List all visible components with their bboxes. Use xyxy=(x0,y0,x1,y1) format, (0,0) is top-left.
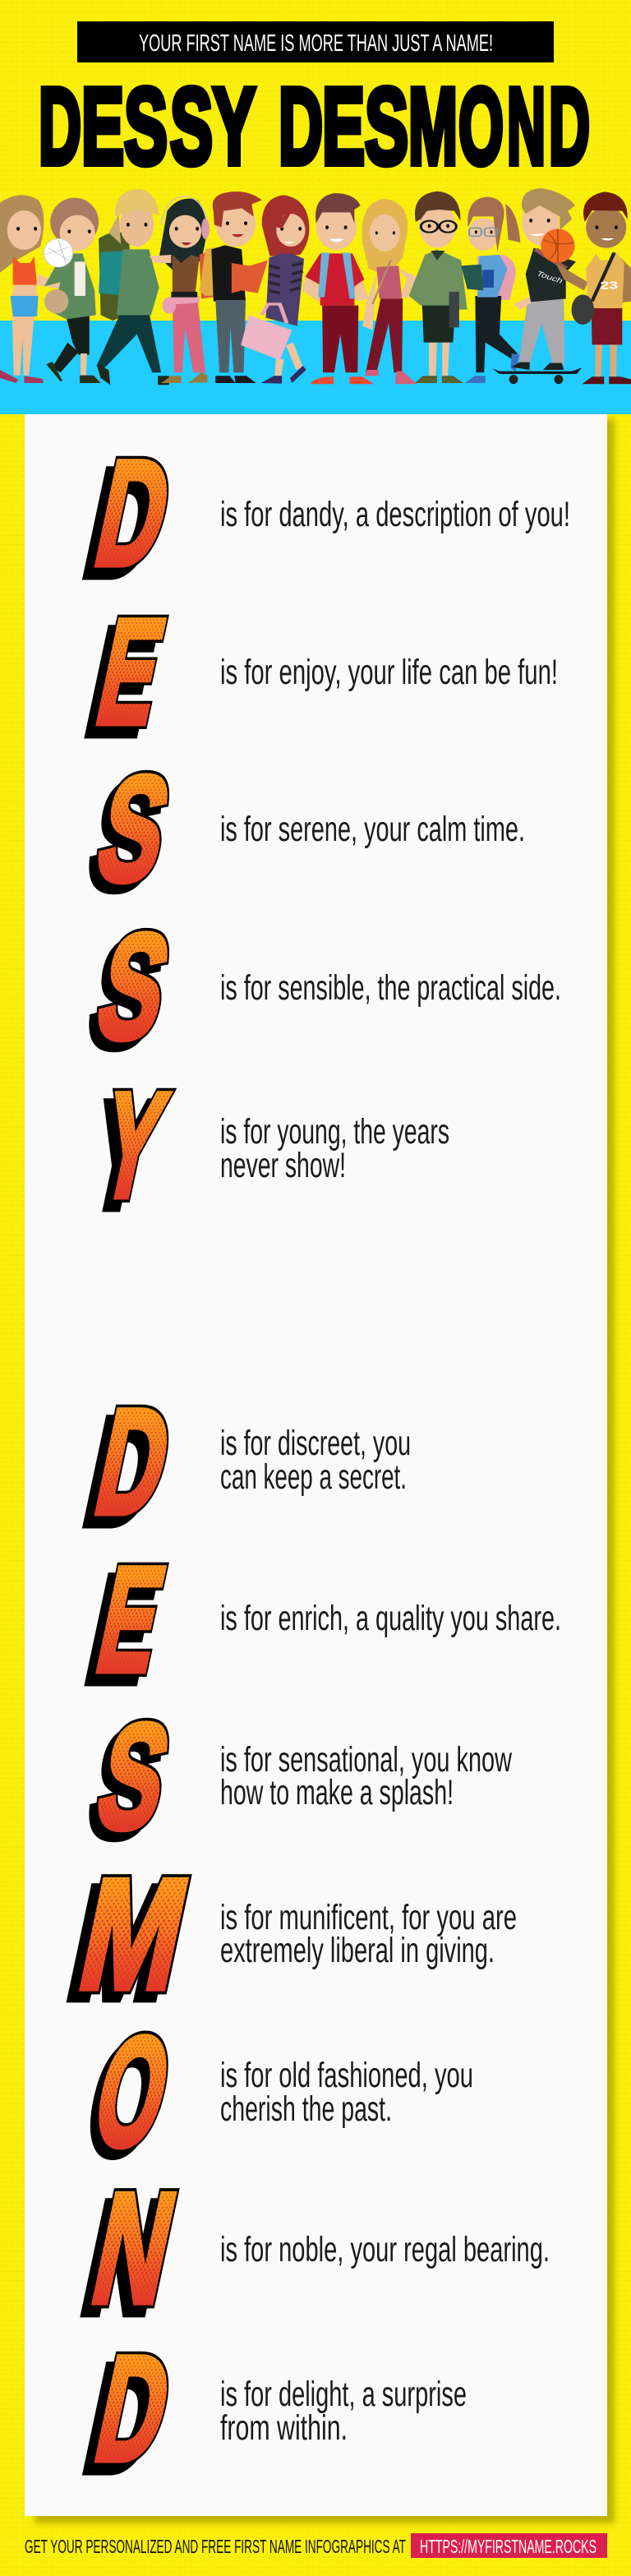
description: how to make a splash! xyxy=(220,1773,454,1812)
letter N: N xyxy=(80,2161,188,2336)
letter N: N xyxy=(71,2171,179,2346)
person 7 xyxy=(302,193,374,384)
row S sensible xyxy=(77,903,561,1078)
description: is for old fashioned, you xyxy=(220,2056,473,2095)
letter E: E xyxy=(76,598,168,765)
description: is for young, the years xyxy=(220,1112,449,1152)
letter E: E xyxy=(85,1535,177,1703)
letter E: E xyxy=(76,1545,168,1713)
letter D: D xyxy=(84,1379,184,1545)
letter E: E xyxy=(85,1535,177,1703)
letter N: N xyxy=(80,2161,188,2336)
row D dandy xyxy=(73,431,570,607)
title: S xyxy=(365,66,408,187)
white panel xyxy=(25,414,607,2516)
letter M: M xyxy=(57,1855,191,2031)
person 4 xyxy=(149,196,210,383)
letter D: D xyxy=(84,2326,184,2492)
row E enjoy xyxy=(76,588,558,765)
letter S: S xyxy=(85,1693,182,1860)
person 9 xyxy=(409,192,467,383)
letter S: S xyxy=(85,903,182,1070)
row N noble xyxy=(71,2161,550,2346)
person 5 xyxy=(200,192,268,383)
person 2 xyxy=(44,198,101,383)
description: cherish the past. xyxy=(220,2089,392,2129)
letter S: S xyxy=(85,1693,182,1860)
person 11 on skateboard: Touch xyxy=(534,270,564,285)
letter D: D xyxy=(84,2326,184,2492)
title: Y xyxy=(213,66,256,187)
blue ground band xyxy=(0,321,631,414)
person 8 xyxy=(362,199,417,384)
comic letters and descriptions xyxy=(57,431,570,2502)
title: N xyxy=(507,66,546,187)
description: is for delight, a surprise xyxy=(220,2375,467,2414)
letter S: S xyxy=(85,746,182,912)
letter Y: Y xyxy=(87,1061,178,1229)
letter S: S xyxy=(85,746,182,912)
person 11 on skateboard xyxy=(492,188,582,384)
person 1 xyxy=(0,195,61,383)
description: extremely liberal in giving. xyxy=(220,1931,495,1970)
letter E: E xyxy=(85,588,177,755)
person 3 xyxy=(97,189,169,385)
letter D: D xyxy=(73,2336,173,2502)
letter D: D xyxy=(84,1379,184,1545)
row S sensational xyxy=(77,1693,513,1867)
description xyxy=(220,1112,449,1185)
row E enrich xyxy=(76,1535,561,1713)
description xyxy=(220,1424,411,1497)
letter Y: Y xyxy=(87,1061,178,1229)
description xyxy=(220,1898,517,1970)
title: S xyxy=(124,66,168,187)
person 6 xyxy=(241,195,309,384)
title: S xyxy=(170,66,213,187)
title: D xyxy=(549,66,590,187)
person 12 xyxy=(541,192,631,384)
letter D: D xyxy=(84,2326,184,2492)
letter D: D xyxy=(84,431,184,597)
row S serene xyxy=(77,746,525,920)
description xyxy=(220,2375,467,2448)
letter S: S xyxy=(85,746,182,912)
banner: tagline xyxy=(77,21,554,62)
description xyxy=(220,1740,513,1812)
letter D: D xyxy=(84,431,184,597)
letter E: E xyxy=(85,588,177,755)
description: can keep a secret. xyxy=(220,1457,407,1497)
row M munificent xyxy=(57,1847,517,2031)
letter Y: Y xyxy=(87,1061,178,1229)
title: D xyxy=(279,66,323,187)
letter D: D xyxy=(73,1389,173,1555)
letter E: E xyxy=(85,1535,177,1703)
letter O: O xyxy=(81,2005,184,2178)
title xyxy=(39,66,590,187)
description: is for discreet, you xyxy=(220,1424,411,1463)
title: M xyxy=(408,66,458,187)
letter D: D xyxy=(84,431,184,597)
row O old fashioned xyxy=(75,2005,473,2186)
panel shadow xyxy=(35,419,615,2523)
row Y young xyxy=(77,1061,449,1239)
letter S: S xyxy=(85,903,182,1070)
letter S: S xyxy=(85,1693,182,1860)
letter D: D xyxy=(73,441,173,607)
description: from within. xyxy=(220,2408,348,2448)
letter M: M xyxy=(67,1847,201,2022)
letter M: M xyxy=(67,1847,201,2022)
letter S: S xyxy=(77,911,175,1078)
letter S: S xyxy=(85,903,182,1070)
letter D: D xyxy=(84,1379,184,1545)
person 12: 23 xyxy=(600,279,618,292)
letter O: O xyxy=(81,2005,184,2178)
title: E xyxy=(81,66,124,187)
title: O xyxy=(458,66,504,187)
letter M: M xyxy=(67,1847,201,2022)
title: D xyxy=(39,66,81,187)
row D discreet xyxy=(73,1379,411,1555)
row D delight xyxy=(73,2326,467,2502)
letter O: O xyxy=(81,2005,184,2178)
illustration: group of students xyxy=(0,188,631,385)
description xyxy=(220,2056,473,2129)
letter E: E xyxy=(85,588,177,755)
letter S: S xyxy=(77,753,175,920)
letter S: S xyxy=(77,1701,175,1867)
letter Y: Y xyxy=(77,1071,169,1239)
title: E xyxy=(322,66,365,187)
letter N: N xyxy=(80,2161,188,2336)
person 10 xyxy=(461,196,520,383)
description: never show! xyxy=(220,1146,346,1185)
letter O: O xyxy=(75,2012,177,2186)
